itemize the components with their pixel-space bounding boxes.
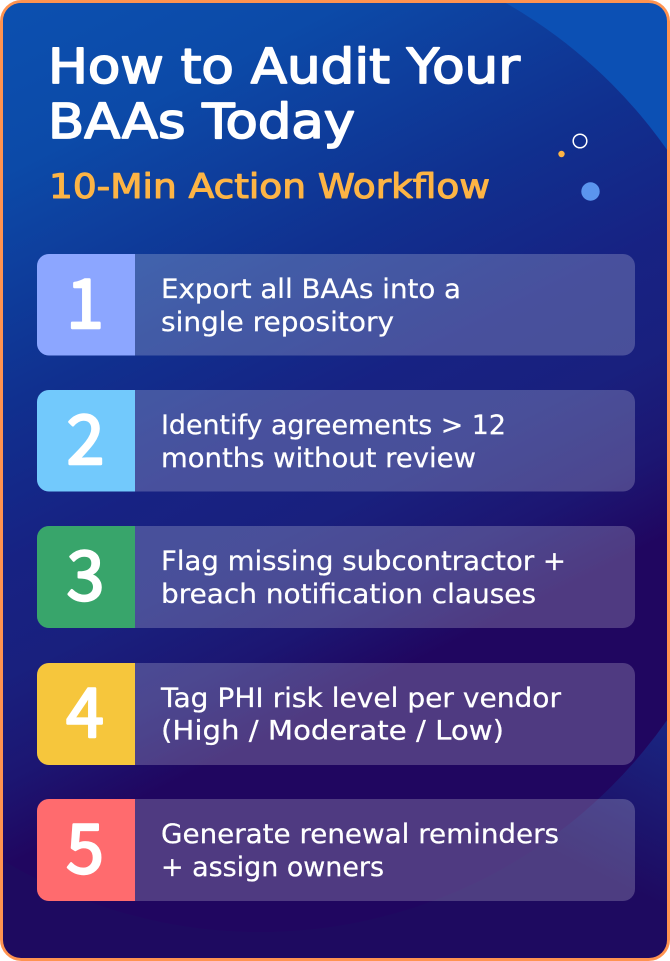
step 1 text <box>161 274 461 338</box>
title: How to Audit Your <box>48 39 520 95</box>
step 1 number badge: 1 <box>66 249 104 348</box>
step 4 card <box>37 658 635 765</box>
title <box>48 39 520 150</box>
step 4 number badge: 4 <box>66 658 104 757</box>
decorative dots <box>558 134 600 201</box>
step 5 number badge: 5 <box>66 794 104 893</box>
step 4 number badge <box>37 658 135 765</box>
step 2 card <box>37 385 635 492</box>
step 1 text: single repository <box>161 307 394 338</box>
step 2 text: Identify agreements > 12 <box>161 410 506 441</box>
step 2 number badge: 2 <box>67 385 104 484</box>
step 3 card <box>37 521 635 628</box>
title: BAAs Today <box>48 94 355 150</box>
step 1 number badge <box>37 249 135 356</box>
step 4 text: Tag PHI risk level per vendor <box>160 683 561 714</box>
step 2 text <box>161 410 506 474</box>
step 1 text: Export all BAAs into a <box>161 274 461 305</box>
step 5 card <box>37 794 635 901</box>
step 3 text: breach notification clauses <box>161 579 536 610</box>
step 3 text <box>161 546 566 610</box>
step 3 number badge <box>37 521 135 628</box>
step 5 text: + assign owners <box>161 852 384 883</box>
step 5 text: Generate renewal reminders <box>161 819 559 850</box>
step 3 text: Flag missing subcontractor + <box>161 546 566 577</box>
step 5 text <box>161 819 559 883</box>
step 4 text: (High / Moderate / Low) <box>161 716 504 746</box>
step 1 card <box>37 249 635 356</box>
step 4 text <box>160 683 561 746</box>
step 3 number badge: 3 <box>67 521 104 620</box>
step 2 text: months without review <box>161 443 476 474</box>
step 2 number badge <box>37 385 135 492</box>
step 5 number badge <box>37 794 135 901</box>
subtitle: 10-Min Action Workflow <box>49 167 490 207</box>
